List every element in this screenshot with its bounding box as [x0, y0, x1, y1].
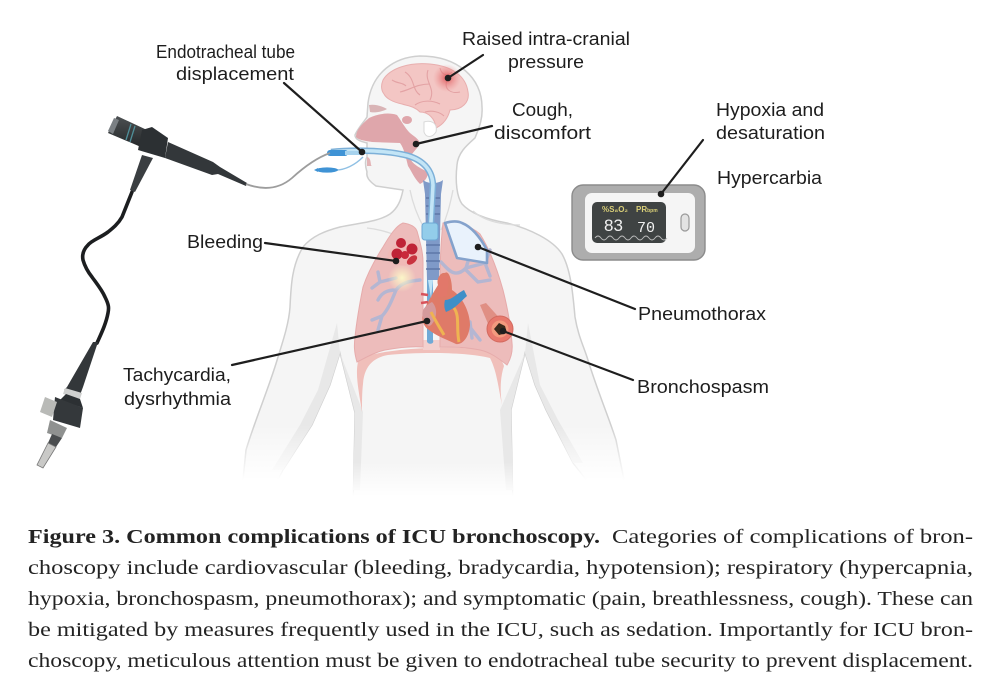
heart	[421, 272, 470, 344]
label: hypercarbia: Hypercarbia	[717, 167, 823, 188]
pulse oximeter: %S₈O₂	[602, 205, 628, 214]
label: raised intra-cranial pressure: pressure	[508, 51, 584, 72]
label: endotracheal tube displacement: displacement	[176, 63, 294, 84]
leader: bronchospasm	[500, 328, 633, 380]
scope lower grip	[64, 342, 98, 395]
leader: pneumothorax	[475, 244, 635, 309]
leader: hypoxia	[658, 140, 703, 197]
pulse oximeter: PRbpm	[636, 205, 658, 214]
figure caption: Figure 3. Common complications of ICU bronchoscopy.	[28, 526, 600, 548]
label: bleeding: Bleeding	[187, 231, 263, 252]
bleeding site	[387, 238, 419, 292]
endotracheal tube connector and pilot balloon	[314, 153, 363, 173]
leader: tachycardia	[232, 318, 430, 365]
scope flexible cord	[83, 192, 132, 343]
scope insertion cable	[246, 153, 330, 188]
pulse oximeter: 83	[604, 216, 623, 235]
label: tachycardia, dysrhythmia	[123, 364, 232, 409]
pulse oximeter	[572, 185, 705, 260]
human body silhouette	[240, 56, 630, 510]
leader: endotracheal tube	[284, 83, 365, 155]
label: bronchospasm: Bronchospasm	[637, 376, 769, 397]
scope eyepiece	[108, 116, 147, 147]
oral and nasal cavity	[356, 105, 428, 184]
pulse oximeter: 70	[637, 220, 655, 237]
label: raised intra-cranial pressure	[462, 28, 630, 72]
label: endotracheal tube displacement	[156, 41, 295, 84]
figure caption: hypoxia, bronchospasm, pneumothorax); and symptomatic (pain, breathlessness, cough). These can	[28, 588, 973, 610]
bottom fade of arms	[230, 425, 640, 515]
figure caption: be mitigated by measures frequently used in the ICU, such as sedation. Importantly for ICU bron-	[28, 619, 973, 641]
label: cough, discomfort: discomfort	[494, 122, 591, 143]
bottom fade of torso	[340, 462, 525, 514]
endotracheal tube and trachea	[331, 151, 443, 344]
leader: cough	[413, 126, 492, 147]
label: cough, discomfort	[494, 99, 591, 143]
figure caption: choscopy, meticulous attention must be given to endotracheal tube security to prevent displacement.	[28, 650, 973, 672]
bronchial tree	[372, 248, 490, 340]
brain	[382, 64, 468, 136]
label: tachycardia, dysrhythmia: Tachycardia,	[123, 364, 231, 385]
label: pneumothorax: Pneumothorax	[638, 303, 767, 324]
figure caption	[28, 526, 973, 672]
figure caption: Categories of complications of bron-	[612, 526, 973, 548]
bronchoscope	[37, 116, 247, 468]
leader: intra-cranial pressure	[445, 55, 483, 81]
scope handle	[138, 127, 168, 158]
label: tachycardia, dysrhythmia: dysrhythmia	[124, 388, 232, 409]
figure caption: choscopy include cardiovascular (bleeding, bradycardia, hypotension); respiratory (hypercapnia,	[28, 557, 973, 579]
lungs	[354, 223, 512, 412]
label: hypoxia and desaturation: desaturation	[716, 122, 825, 143]
label: raised intra-cranial pressure: Raised intra-cranial	[462, 28, 630, 49]
label: hypoxia and desaturation	[716, 99, 825, 143]
label: endotracheal tube displacement: Endotracheal tube	[156, 41, 295, 62]
label: hypoxia and desaturation: Hypoxia and	[716, 99, 824, 120]
leader: bleeding	[265, 243, 399, 264]
bronchospasm airway	[480, 303, 513, 342]
label: cough, discomfort: Cough,	[512, 99, 573, 120]
pneumothorax	[445, 222, 487, 263]
